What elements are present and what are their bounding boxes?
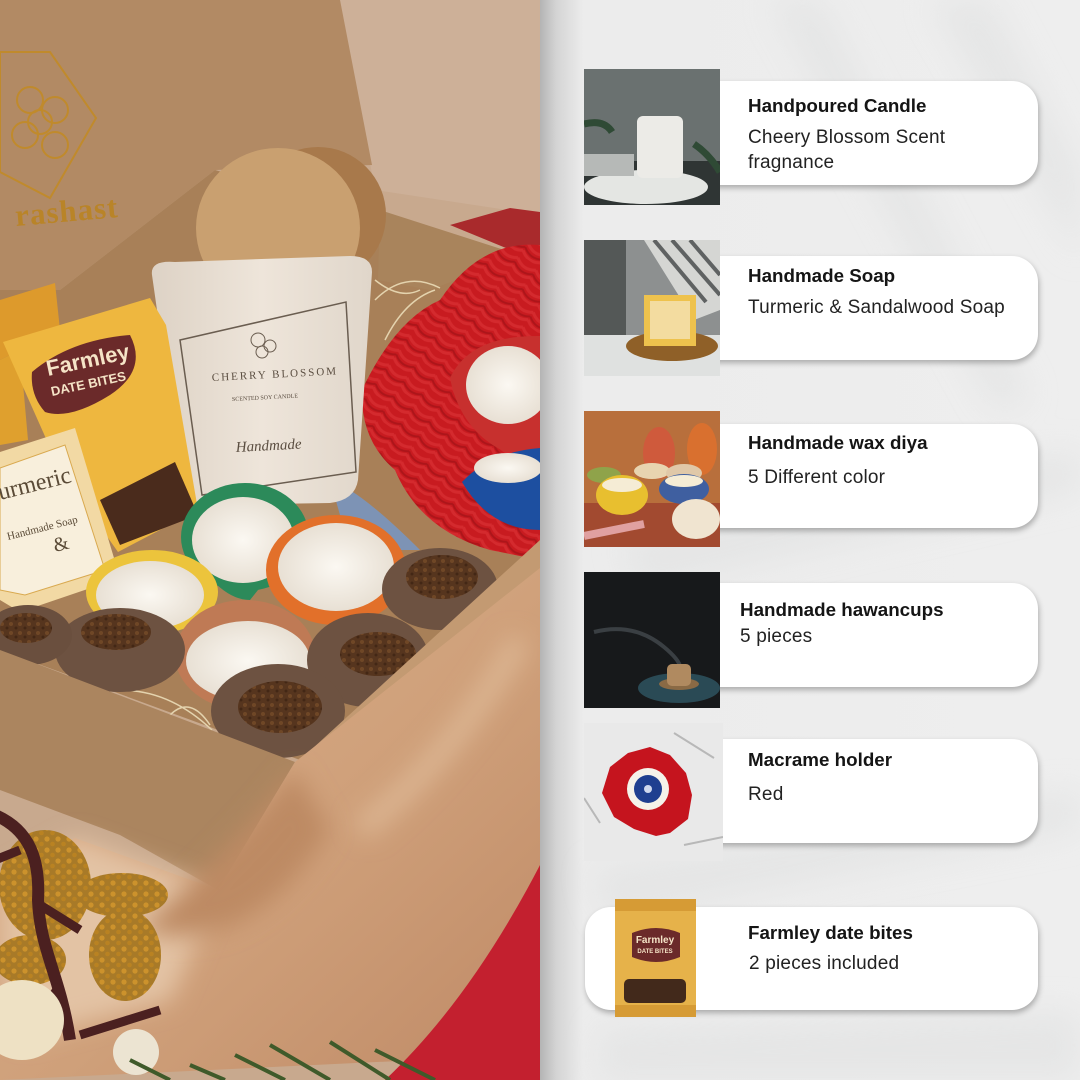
item: date bites	[582, 899, 1042, 1017]
red macrame holder	[362, 245, 540, 560]
orange diya	[266, 515, 406, 625]
thumbnail: packet: Farmley	[636, 935, 675, 946]
left product photo	[0, 0, 540, 1080]
right panel background	[540, 0, 1058, 1080]
thumbnail: packet: DATE BITES	[637, 949, 673, 955]
candle jar: CHERRY BLOSSOM	[212, 365, 338, 384]
item: handmade soap	[584, 240, 1042, 376]
green diya	[181, 483, 309, 600]
wooden lids	[196, 147, 386, 308]
candle jar: Handmade	[234, 437, 302, 456]
date bites packets: DATE BITES	[50, 368, 128, 399]
card 3	[600, 424, 1038, 528]
box interior	[0, 170, 540, 760]
card 5	[600, 739, 1038, 843]
item: macrame holder	[584, 732, 1042, 850]
description: Red	[748, 784, 783, 805]
heading: Handmade Soap	[748, 265, 895, 286]
card 6	[585, 907, 1038, 1010]
description: 2 pieces included	[749, 953, 899, 974]
heading: Farmley date bites	[748, 922, 913, 943]
red diya	[450, 336, 550, 452]
backdrop cloth	[0, 0, 540, 1080]
thumbnail: candle	[584, 69, 720, 205]
item: handpoured candle	[584, 69, 1042, 205]
straw	[32, 280, 440, 730]
thumbnail: diyas	[584, 411, 720, 547]
card 1	[600, 81, 1038, 185]
description: Cheery Blossom Scent	[748, 127, 945, 148]
heading: Handmade wax diya	[748, 432, 928, 453]
turmeric soap box: Handmade Soap	[6, 514, 79, 543]
item: hawan cups	[584, 572, 1042, 708]
candle jar	[152, 256, 372, 505]
heading: Macrame holder	[748, 749, 892, 770]
terracotta diya	[175, 600, 315, 710]
date bites packets	[0, 283, 198, 552]
card 2	[600, 256, 1038, 360]
thumbnail: hawan cup	[584, 572, 720, 708]
item: wax diya	[584, 411, 1042, 547]
description: 5 pieces	[740, 626, 812, 647]
box lid with gold logo: rashast	[14, 189, 120, 233]
dried flowers	[0, 815, 168, 1075]
palm leaves	[130, 1042, 435, 1080]
heading: Handpoured Candle	[748, 95, 926, 116]
red fabric bottom right	[385, 865, 540, 1080]
candle jar: SCENTED SOY CANDLE	[232, 394, 298, 403]
box front wall	[0, 650, 295, 890]
thumbnail: soap	[584, 240, 720, 376]
description	[748, 127, 945, 173]
description: Turmeric & Sandalwood Soap	[748, 297, 1005, 318]
thumbnail: packet	[615, 899, 696, 1017]
card 4	[600, 583, 1038, 687]
yellow diya	[86, 550, 218, 634]
heading: Handmade hawancups	[740, 599, 944, 620]
thumbnail: macrame	[584, 732, 723, 850]
date bites packets: Farmley	[44, 339, 132, 381]
blue fringe	[330, 480, 420, 550]
turmeric soap box	[0, 428, 120, 612]
description: 5 Different color	[748, 467, 885, 488]
box lid with gold logo	[0, 0, 372, 290]
red cloth peek	[450, 208, 540, 262]
velvet fabric	[0, 568, 540, 1080]
blue diya	[462, 448, 542, 530]
description: fragnance	[748, 152, 834, 173]
hawan cups	[0, 548, 498, 758]
turmeric soap box: &	[51, 532, 72, 557]
